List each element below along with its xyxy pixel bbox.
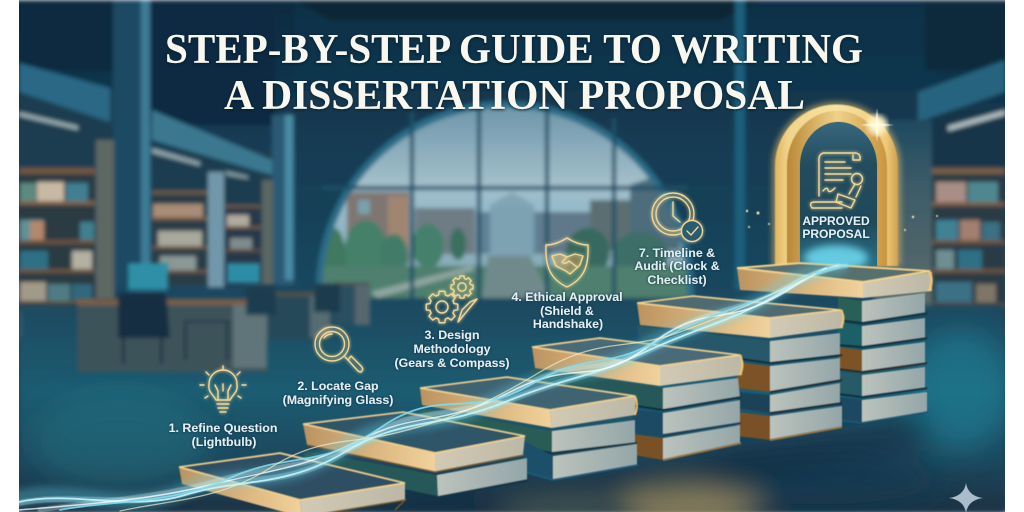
floor [19, 305, 1005, 512]
label: step 2 [283, 379, 393, 407]
label: step 2: (Magnifying Glass) [283, 393, 393, 407]
book stack 3 [420, 376, 638, 480]
title: STEP-BY-STEP GUIDE TO WRITING [165, 27, 863, 73]
approved proposal label: PROPOSAL [802, 227, 870, 241]
book stack 2 [303, 412, 528, 497]
book stack 5 [637, 295, 844, 440]
book stack 6 [838, 293, 928, 423]
columns [110, 0, 142, 202]
left shelf [19, 175, 96, 307]
window [318, 103, 692, 298]
step 4: ethical approval [511, 238, 623, 331]
approved proposal label [802, 216, 870, 239]
step 1: refine question [169, 366, 277, 449]
approved proposal label: APPROVED [802, 214, 870, 228]
icon: shield and handshake [546, 238, 588, 287]
book stack 1 [179, 453, 405, 512]
label: step 1: (Lightbulb) [192, 435, 256, 449]
label: step 4: 4. Ethical Approval [511, 290, 623, 304]
step 2: locate gap [283, 327, 393, 407]
icon: magnifying glass [315, 327, 363, 372]
arch frame inner reveal [787, 111, 887, 266]
middle shelves [152, 190, 208, 285]
label: step 4: (Shield & [540, 304, 594, 318]
icon: sparkle watermark [949, 483, 983, 512]
sparkle flare [860, 108, 894, 142]
title [165, 27, 863, 119]
label: step 7: Audit (Clock & [634, 259, 720, 273]
desks and chairs [77, 263, 370, 372]
label: step 7 [634, 246, 720, 287]
icon: clock and checklist [652, 193, 702, 242]
right shelf [931, 176, 1005, 304]
label: step 3 [394, 328, 510, 370]
book stack 6 top book [737, 262, 932, 298]
label: step 3: (Gears & Compass) [394, 356, 510, 370]
arch glow [772, 102, 901, 266]
golden arch with approved proposal [772, 102, 901, 271]
flowing light ribbons [19, 266, 848, 511]
light burst [804, 245, 868, 271]
label: step 3: Methodology [413, 342, 491, 356]
book stack 4 [530, 337, 742, 460]
label: step 2: 2. Locate Gap [297, 379, 379, 393]
label: step 4 [511, 290, 623, 331]
step 3: design methodology [394, 276, 510, 370]
icon: scroll and stamp [811, 153, 862, 208]
label: step 7: 7. Timeline & [639, 246, 715, 260]
icon: lightbulb [200, 366, 246, 412]
sparkle particles [746, 210, 938, 231]
label: step 3: 3. Design [424, 328, 480, 342]
arch glass [800, 122, 877, 266]
step 7: timeline and audit [634, 193, 720, 287]
floor glow reflections [30, 330, 1010, 512]
label: step 1: 1. Refine Question [169, 421, 277, 435]
label: step 7: Checklist) [647, 273, 707, 287]
arch frame outer [775, 104, 898, 266]
title: A DISSERTATION PROPOSAL [224, 73, 805, 119]
label: step 4: Handshake) [533, 317, 603, 331]
label: step 1 [169, 421, 277, 449]
icon: gears and compass [426, 276, 477, 323]
